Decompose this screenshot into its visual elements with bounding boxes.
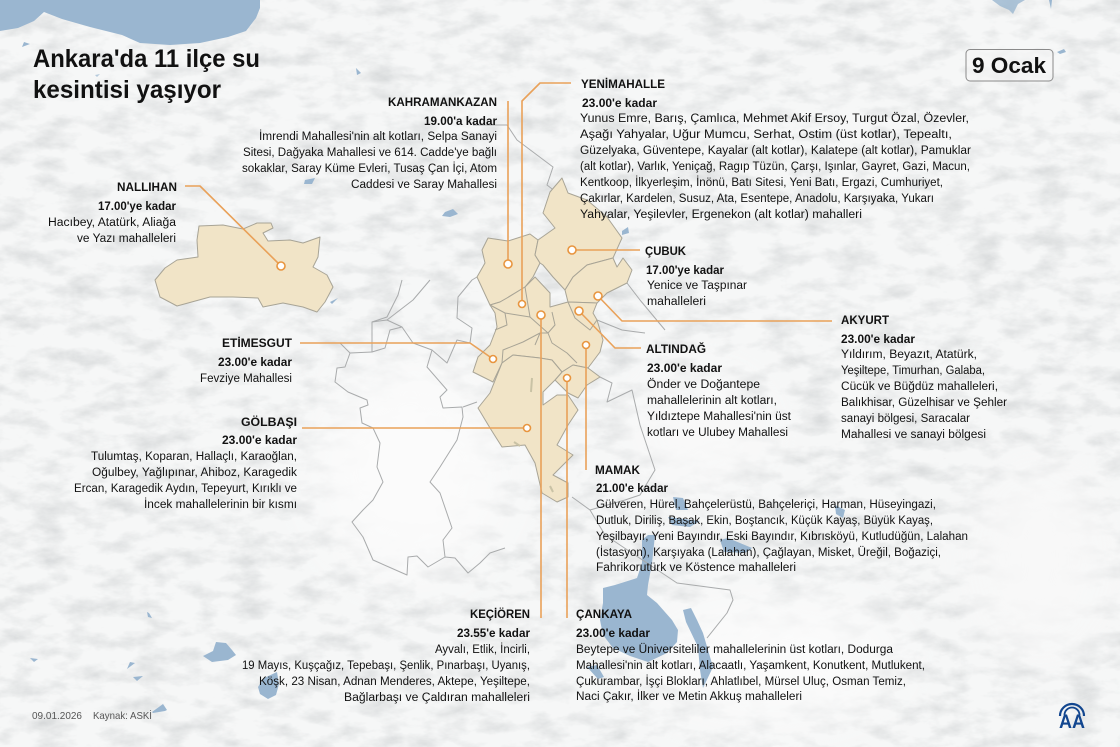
text: Akyurt: Yıldırım, Beyazıt, Atatürk, [841, 349, 977, 361]
text: Altındağ: Yıldıztepe Mahallesi'nin üst [647, 411, 792, 423]
highlighted districts [155, 178, 632, 502]
text: Yenimahalle: Yahyalar, Yeşilevler, Ergenekon (alt kotlar) mahalleri [580, 209, 862, 221]
date badge: 9 Ocak [972, 53, 1047, 78]
district: Gölbaşı [478, 355, 578, 502]
text: Mamak: 21.00'e kadar [596, 481, 668, 495]
leader: Çankaya [564, 374, 570, 618]
leader: Etimesgut [300, 343, 496, 362]
text: Yenimahalle: Aşağı Yahyalar, Uğur Mumcu, Serhat, Ostim (üst kotlar), Tepealtı, [580, 129, 952, 141]
district: Akyurt [565, 258, 632, 303]
text: Çankaya: Naci Çakır, İlker ve Metin Akkuş mahalleleri [576, 690, 802, 703]
text: Mamak: (İstasyon), Karşıyaka (Lalahan), Çağlayan, Misket, Üreğil, Boğaziçi, [596, 546, 941, 559]
text: Gölbaşı [74, 414, 297, 511]
text: Çankaya: 23.00'e kadar [576, 626, 650, 640]
text: Çubuk: Yenice ve Taşpınar [647, 280, 747, 292]
text: Yenimahalle [580, 76, 971, 221]
title: Ankara'da 11 ilçe su [33, 45, 260, 73]
leader: Altındağ [575, 307, 641, 348]
text: Akyurt: Mahallesi ve sanayi bölgesi [841, 429, 986, 441]
text: Çubuk [645, 244, 747, 308]
text: Altındağ: 23.00'e kadar [647, 361, 722, 375]
text: Keçiören [242, 606, 530, 704]
text: Altındağ: Önder ve Doğantepe [647, 379, 760, 391]
text: Keçiören: Köşk, 23 Nisan, Adnan Menderes, Aktepe, Yeşiltepe, [259, 676, 530, 688]
text: Mamak [595, 463, 968, 574]
leader: Çubuk [568, 246, 640, 254]
leader: Nallıhan [185, 186, 285, 270]
province and district borders [335, 125, 733, 638]
text: Altındağ: kotları ve Ulubey Mahallesi [647, 427, 788, 439]
text: Kahramankazan: Caddesi ve Saray Mahallesi [351, 179, 497, 191]
text: Etimesgut: 23.00'e kadar [218, 355, 292, 369]
text: Mamak: Yeşilbayır, Yeni Bayındır, Eski Bayındır, Kıbrısköyü, Kutludüğün, Lalahan [596, 531, 968, 543]
text: Nallıhan: ve Yazı mahalleleri [77, 233, 176, 245]
text: Yenimahalle: Yunus Emre, Barış, Çamlıca, Mehmet Akif Ersoy, Turgut Özal, Özevler, [580, 113, 969, 125]
icon: AA logo: AA [1059, 712, 1085, 733]
leader: Kahramankazan [504, 101, 512, 268]
text: Akyurt: 23.00'e kadar [841, 332, 915, 346]
text: Keçiören: 23.55'e kadar [457, 626, 530, 640]
leader: Yenimahalle [518, 83, 571, 308]
leader: Gölbaşı [302, 424, 530, 432]
text: Altındağ [646, 341, 792, 439]
text: Keçiören: Bağlarbaşı ve Çaldıran mahalleleri [344, 692, 530, 704]
footer: date and source [32, 709, 152, 722]
text: Kahramankazan: 19.00'a kadar [424, 114, 497, 128]
text: Çankaya: ÇANKAYA [576, 607, 632, 621]
title: kesintisi yaşıyor [33, 76, 221, 104]
text: Yenimahalle: Çakırlar, Kardelen, Susuz, Ata, Esentepe, Anadolu, Karşıyaka, Yukarı [580, 193, 934, 205]
text: Gölbaşı: Tulumtaş, Koparan, Hallaçlı, Karaoğlan, [91, 451, 297, 463]
leader: Mamak [582, 342, 590, 470]
text: Gölbaşı: 23.00'e kadar [222, 433, 297, 447]
text: Altındağ: ALTINDAĞ [646, 341, 706, 356]
text: Yenimahalle: Kentkoop, İlkyerleşim, İnönü, Batı Sitesi, Yeni Batı, Ergazi, Cumhuriyet, [580, 176, 943, 189]
text: Gölbaşı: İncek mahallelerinin bir kısmı [144, 498, 297, 511]
district group: Yenimahalle, Keçiören, Altındağ, Mamak [473, 277, 603, 382]
district: Çankaya [555, 365, 600, 398]
text: Etimesgut: ETİMESGUT [222, 335, 293, 350]
text: Çankaya [576, 607, 925, 703]
text: Gölbaşı: Ercan, Karagedik Aydın, Tepeyurt, Kırıklı ve [74, 483, 297, 495]
text: Nallıhan: NALLIHAN [117, 180, 177, 194]
text: Keçiören: 19 Mayıs, Kuşçağız, Tepebaşı, Şenlik, Pınarbaşı, Uyanış, [242, 660, 530, 672]
text: Çubuk: mahalleleri [647, 296, 706, 308]
district: Çubuk [535, 178, 622, 290]
text: Çubuk: ÇUBUK [645, 244, 686, 258]
district: Kahramankazan [477, 234, 540, 305]
text: Kahramankazan: KAHRAMANKAZAN [388, 95, 497, 109]
text: Kahramankazan: İmrendi Mahallesi'nin alt kotları, Selpa Sanayi [259, 130, 497, 143]
text: Çankaya: Mahallesi'nin alt kotları, Alacaatlı, Yaşamkent, Konutkent, Mutlukent, [576, 660, 925, 672]
date badge [966, 50, 1053, 81]
text: Akyurt: sanayi bölgesi, Saracalar [841, 413, 970, 425]
text: Etimesgut [200, 335, 293, 385]
text: Kahramankazan [242, 95, 497, 191]
text: Akyurt: AKYURT [841, 313, 890, 327]
text: Çankaya: Beytepe ve Üniversiteliler mahallelerinin üst kotları, Dodurga [576, 644, 894, 656]
text: Akyurt: Yeşiltepe, Timurhan, Galaba, [841, 365, 985, 377]
text: Mamak: Gülveren, Hürel, Bahçelerüstü, Bahçeleriçi, Harman, Hüseyingazi, [596, 499, 936, 511]
text: Akyurt: Cücük ve Büğdüz mahalleleri, [841, 381, 998, 393]
inner district lines [490, 287, 597, 363]
text: Yenimahalle: YENİMAHALLE [581, 76, 665, 91]
text: Kahramankazan: sokaklar, Saray Küme Evleri, Tusaş Çan İçi, Atom [242, 162, 497, 175]
text: Çubuk: 17.00'ye kadar [646, 263, 724, 277]
text: Altındağ: mahallelerinin alt kotları, [647, 395, 777, 407]
text: Akyurt [841, 313, 1007, 441]
leader: Akyurt [594, 292, 832, 321]
text: Etimesgut: Fevziye Mahallesi [200, 373, 292, 385]
text: Yenimahalle: (alt kotlar), Varlık, Yeniçağ, Ragıp Tüzün, Çarşı, Işınlar, Gayret, Gazi, Macun, [580, 161, 970, 173]
text: Keçiören: Ayvalı, Etlik, İncirli, [435, 643, 530, 656]
footer: date and source: 09.01.2026 [32, 710, 82, 722]
text: Yenimahalle: 23.00'e kadar [582, 96, 657, 110]
title [33, 45, 260, 104]
text: Akyurt: Balıkhisar, Güzelhisar ve Şehler [841, 397, 1007, 409]
footer: date and source: Kaynak: ASKİ [93, 709, 152, 722]
leader: Keçiören [537, 311, 545, 618]
text: Yenimahalle: Güzelyaka, Güventepe, Kayalar (alt kotlar), Kalatepe (alt kotlar), Pamuklar [580, 145, 971, 157]
text: Mamak: Dutluk, Diriliş, Başak, Ekin, Boştancık, Küçük Kayaş, Büyük Kayaş, [596, 515, 933, 527]
text: Çankaya: Çukurambar, İşçi Blokları, Ahlatlıbel, Mürsel Uluç, Osman Temiz, [576, 675, 906, 688]
text: Nallıhan: 17.00'ye kadar [98, 199, 176, 213]
text: Kahramankazan: Sitesi, Dağyaka Mahallesi ve 614. Cadde'ye bağlı [243, 147, 497, 159]
text: Mamak: Fahrikorutürk ve Köstence mahalleleri [596, 562, 796, 574]
text: Nallıhan: Hacıbey, Atatürk, Aliağa [48, 217, 177, 229]
text: Nallıhan [48, 180, 177, 245]
text: Gölbaşı: Oğulbey, Yağlıpınar, Ahiboz, Karagedik [92, 467, 297, 479]
text: Keçiören: KEÇİÖREN [470, 606, 530, 621]
text: Gölbaşı: GÖLBAŞI [241, 414, 297, 429]
district: Nallıhan [155, 223, 333, 312]
text: Mamak: MAMAK [595, 463, 640, 477]
